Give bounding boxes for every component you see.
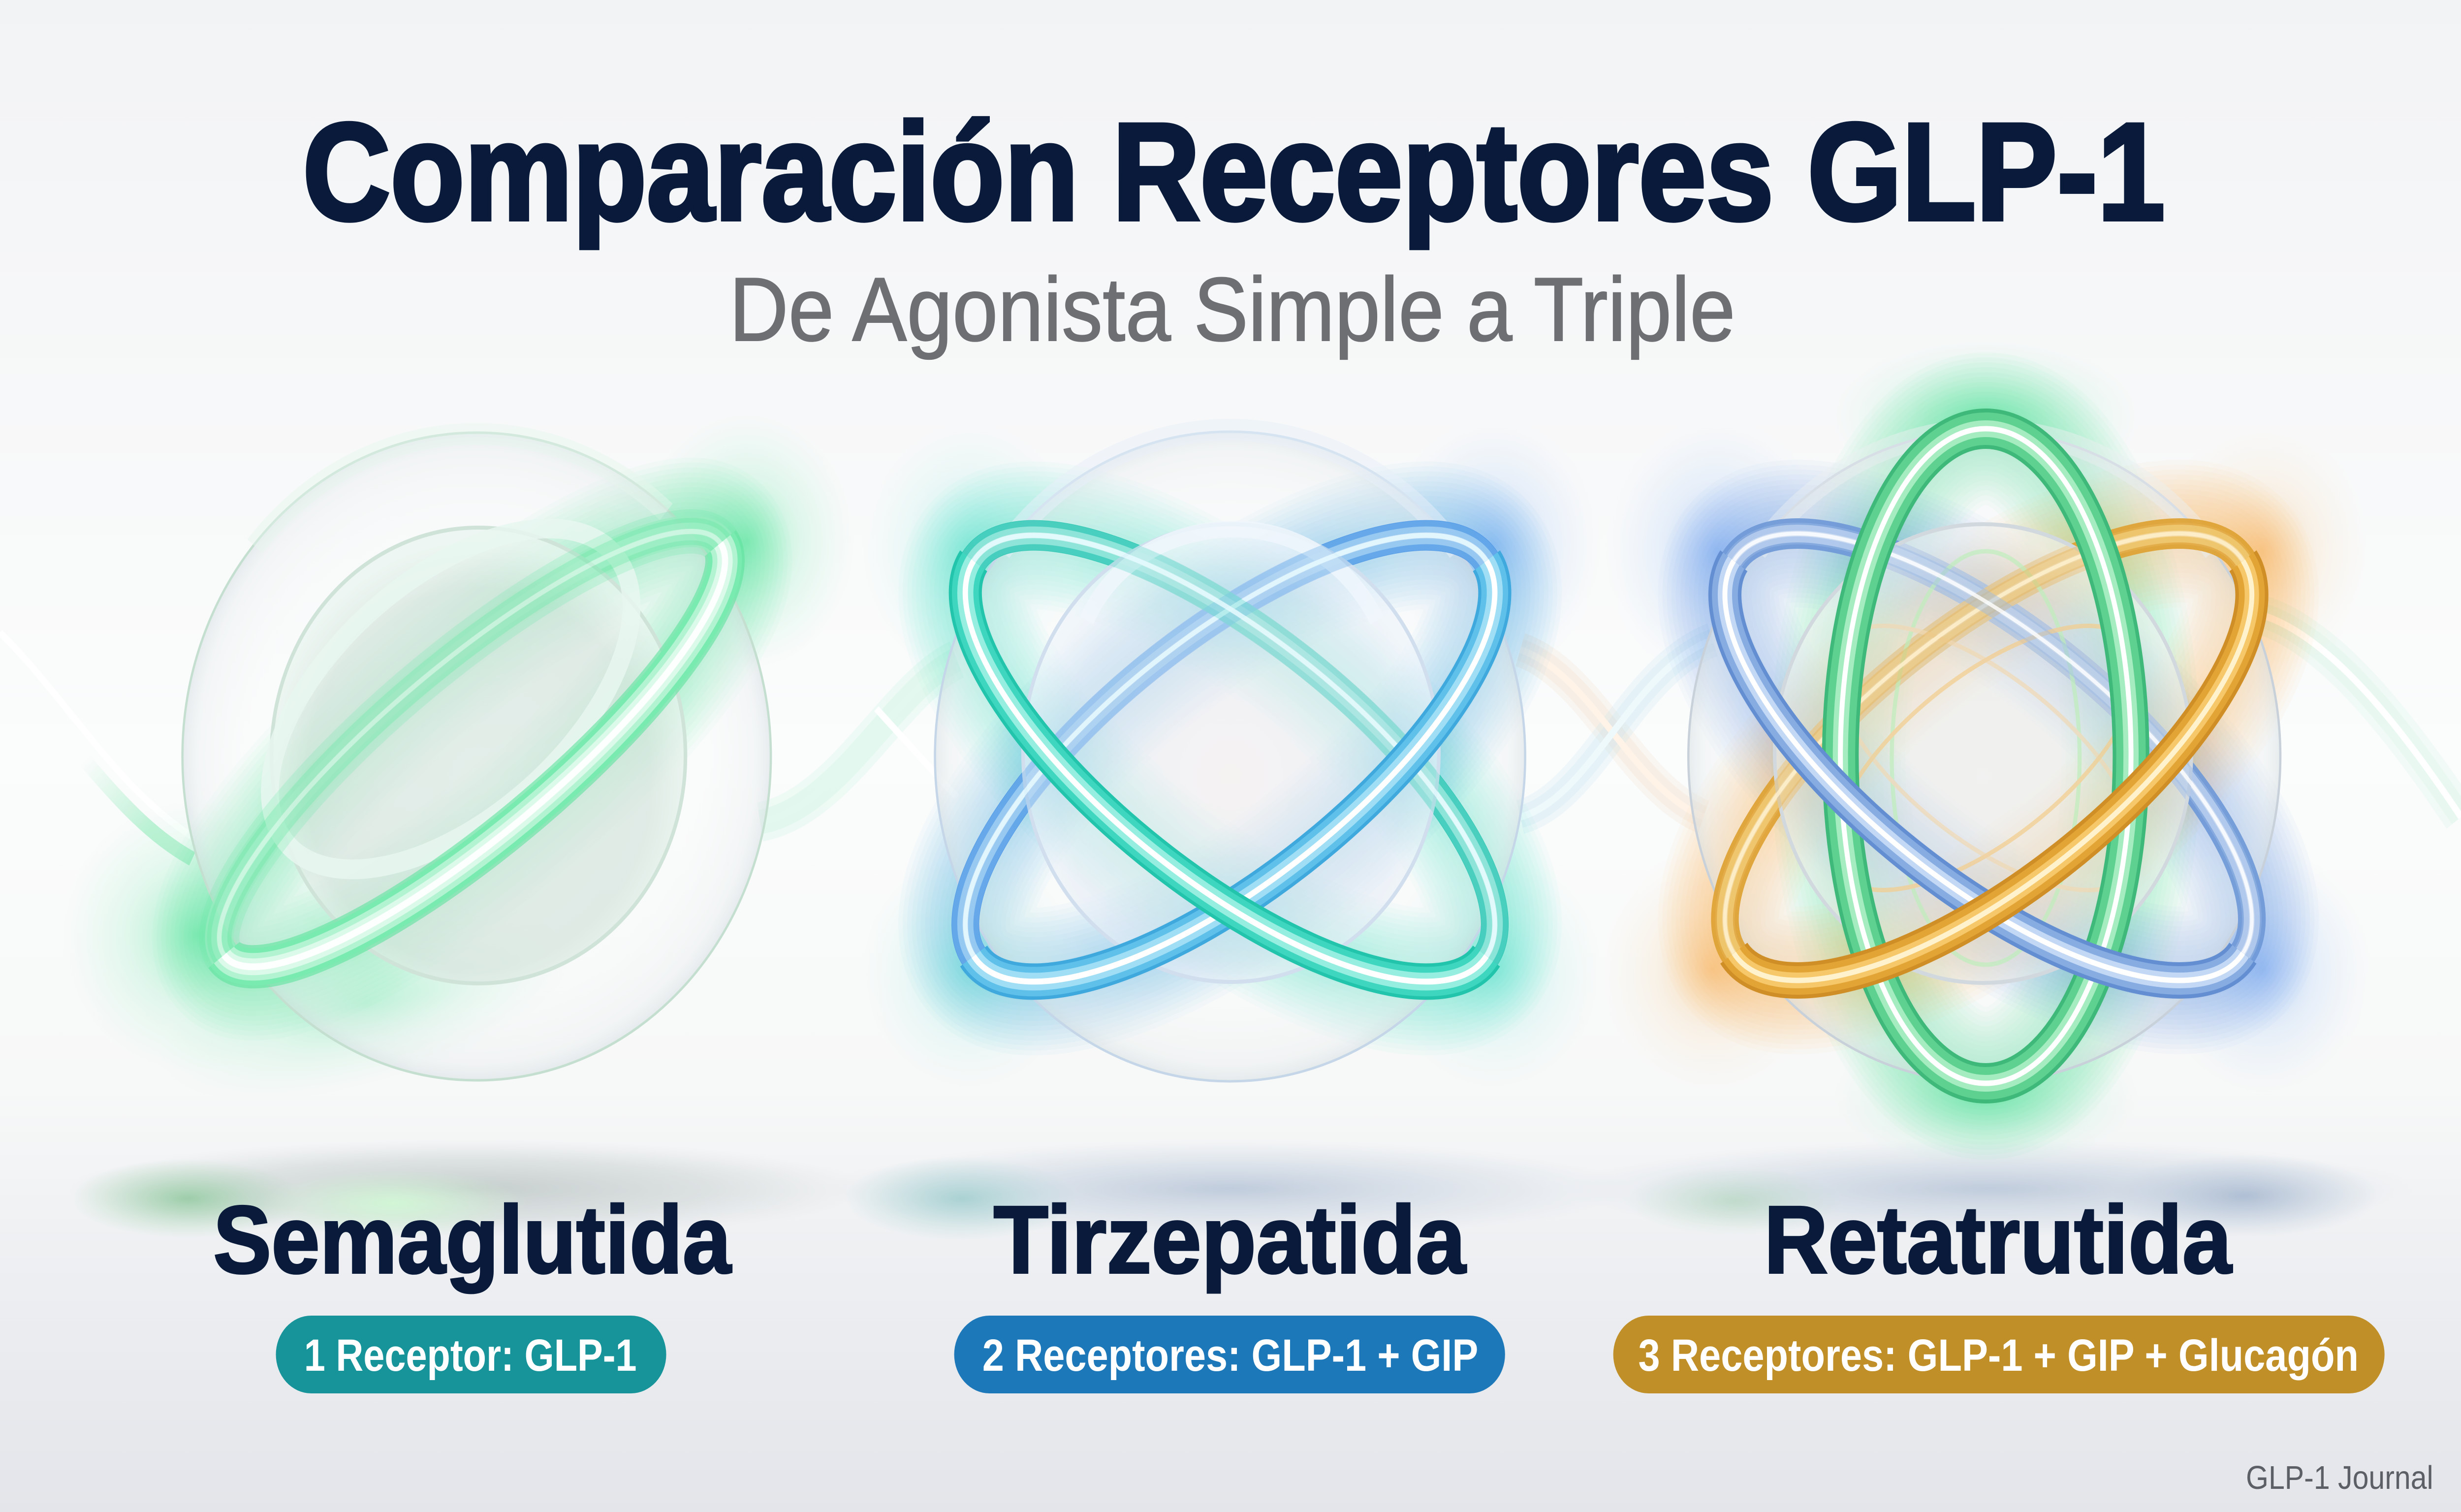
sphere: Retatrutida three rings — [1601, 340, 2370, 1169]
subtitle: De Agonista Simple a Triple — [729, 259, 1735, 360]
drug name: Retatrutida: Retatrutida — [1764, 1186, 2232, 1293]
drug name: Semaglutida: Semaglutida — [213, 1186, 732, 1293]
floor reflections — [67, 1139, 2415, 1240]
background light waves — [0, 615, 2461, 859]
pill: 2 receptors — [954, 1316, 1505, 1393]
title: Comparación Receptores GLP-1 — [303, 94, 2165, 250]
pill: 3 receptors: 3 Receptores: GLP-1 + GIP + Glucagón — [1638, 1329, 2359, 1381]
pill: 3 receptors — [1613, 1316, 2385, 1393]
drug name: Tirzepatida: Tirzepatida — [994, 1186, 1466, 1293]
pill: 1 receptor — [276, 1316, 666, 1393]
pill: 1 receptor: 1 Receptor: GLP-1 — [304, 1329, 637, 1381]
footer credit: GLP-1 Journal — [2246, 1459, 2433, 1496]
pill: 2 receptors: 2 Receptores: GLP-1 + GIP — [982, 1329, 1478, 1381]
sphere: Semaglutida single green ring — [63, 413, 854, 1137]
sphere: Tirzepatida two rings — [863, 418, 1601, 1088]
